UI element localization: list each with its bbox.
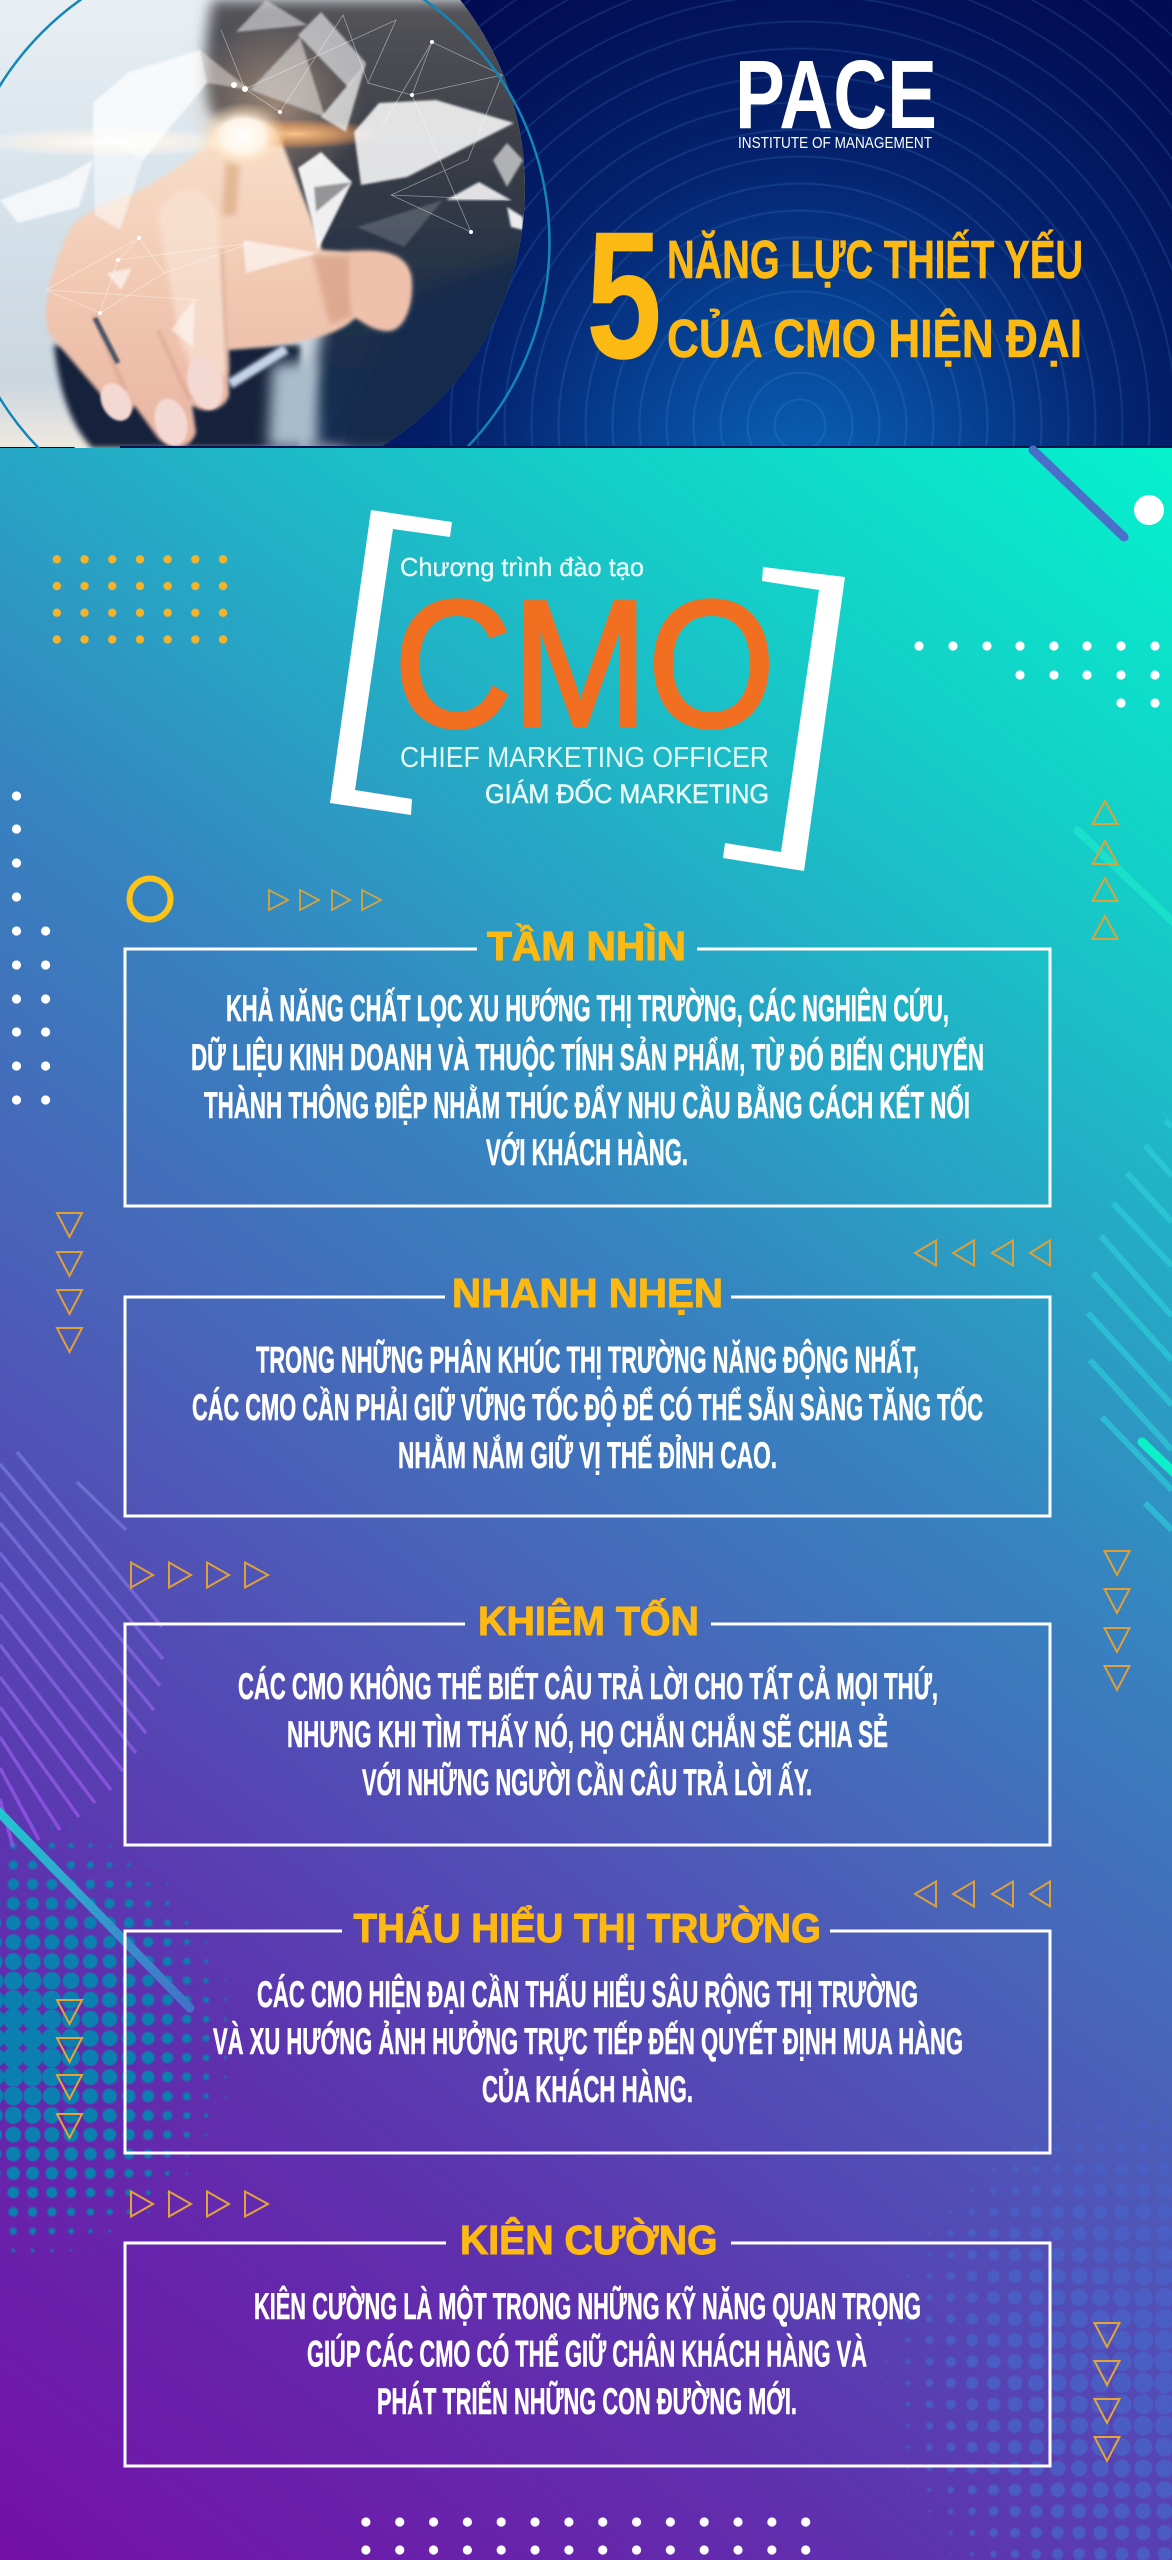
body text bbox=[192, 1338, 983, 1476]
concentric rings bbox=[440, 0, 1172, 448]
decoration: top right line bbox=[1033, 450, 1124, 537]
decoration: right arrows row 2 bbox=[131, 1562, 268, 1588]
heading: KHIÊM TỐN bbox=[478, 1598, 699, 1644]
header base strip bbox=[120, 446, 1172, 448]
panel: Kiên cường bbox=[125, 2217, 1050, 2466]
full name: CHIEF MARKETING OFFICER bbox=[400, 742, 769, 774]
left bracket bbox=[330, 510, 452, 815]
frame bbox=[125, 1624, 1050, 1845]
decoration: teal line right bbox=[1077, 830, 1172, 938]
heading: THẤU HIỂU THỊ TRƯỜNG bbox=[354, 1904, 821, 1951]
header navy background bbox=[0, 0, 1172, 448]
right halftone pattern bbox=[886, 2083, 1172, 2560]
decoration: white circle bbox=[1134, 495, 1164, 525]
thin ring around the photo bbox=[0, 0, 551, 448]
frame bbox=[125, 2243, 1050, 2466]
decoration: orange dot grid bbox=[43, 546, 237, 653]
title line 2: CỦA CMO HIỆN ĐẠI bbox=[667, 308, 1082, 369]
body text bbox=[254, 2285, 921, 2422]
decoration: down triangles left A bbox=[57, 1213, 82, 1352]
heading: TẦM NHÌN bbox=[487, 923, 686, 969]
heading: NHANH NHẸN bbox=[452, 1270, 723, 1316]
heading: KIÊN CƯỜNG bbox=[460, 2217, 718, 2263]
decoration: left diagonal stripes bbox=[0, 1452, 163, 1847]
body text: PHÁT TRIỂN NHỮNG CON ĐƯỜNG MỚI. bbox=[377, 2380, 797, 2422]
CMO wordmark: CMO bbox=[394, 564, 775, 765]
body text: NHẰM NẮM GIỮ VỊ THẾ ĐỈNH CAO. bbox=[398, 1434, 777, 1476]
photo: pointing hand with network bbox=[0, 0, 540, 449]
decoration: right diagonal stripes bbox=[1088, 1120, 1172, 1530]
Vietnamese name: GIÁM ĐỐC MARKETING bbox=[485, 777, 769, 809]
decoration: bottom white dots bbox=[349, 2508, 822, 2560]
body text bbox=[213, 1973, 963, 2110]
decoration: white dots top right bbox=[914, 641, 1160, 708]
big number 5: 5 bbox=[586, 193, 662, 397]
logo tagline: INSTITUTE OF MANAGEMENT bbox=[738, 135, 932, 152]
decoration: long diagonal line bbox=[0, 1808, 190, 2008]
frame bbox=[125, 1931, 1050, 2153]
frame bbox=[125, 949, 1050, 1206]
decoration: down triangles right C bbox=[1094, 2323, 1120, 2461]
decoration: down triangles left B bbox=[57, 2000, 82, 2138]
decoration: up triangles bbox=[1092, 801, 1118, 939]
decoration: right arrows row 4 bbox=[131, 2192, 268, 2216]
decoration: left arrows row 3 bbox=[915, 1882, 1050, 1906]
panel: Khiêm tốn bbox=[125, 1598, 1050, 1845]
logo: PACE: PACE bbox=[735, 40, 937, 149]
CMO programme badge bbox=[330, 510, 845, 871]
panel: Nhanh nhẹn bbox=[125, 1270, 1050, 1516]
frame bbox=[125, 1297, 1050, 1516]
decoration: right arrows row 1 bbox=[269, 890, 381, 910]
panel: Tầm nhìn bbox=[125, 923, 1050, 1206]
title bbox=[590, 229, 1081, 367]
decoration: white dots left bbox=[12, 791, 50, 1105]
decoration: yellow ring bbox=[130, 878, 170, 920]
body text bbox=[238, 1665, 938, 1803]
decoration: left arrows row 1 bbox=[915, 1240, 1050, 1266]
body text bbox=[191, 987, 984, 1173]
decoration: bright green line bbox=[1142, 1442, 1172, 1488]
programme caption: Chương trình đào tạo bbox=[400, 552, 644, 582]
body text: VỚI NHỮNG NGƯỜI CẦN CÂU TRẢ LỜI ẤY. bbox=[362, 1761, 812, 1803]
body text: CỦA KHÁCH HÀNG. bbox=[482, 2068, 693, 2110]
panel: Thấu hiểu thị trường bbox=[125, 1904, 1050, 2153]
logo: PACE bbox=[739, 60, 934, 148]
header band bbox=[0, 0, 1172, 448]
left halftone pattern bbox=[0, 1824, 228, 2270]
right bracket bbox=[723, 567, 845, 871]
body text: VỚI KHÁCH HÀNG. bbox=[486, 1131, 688, 1173]
decoration: down triangles right bbox=[1104, 1551, 1130, 1690]
